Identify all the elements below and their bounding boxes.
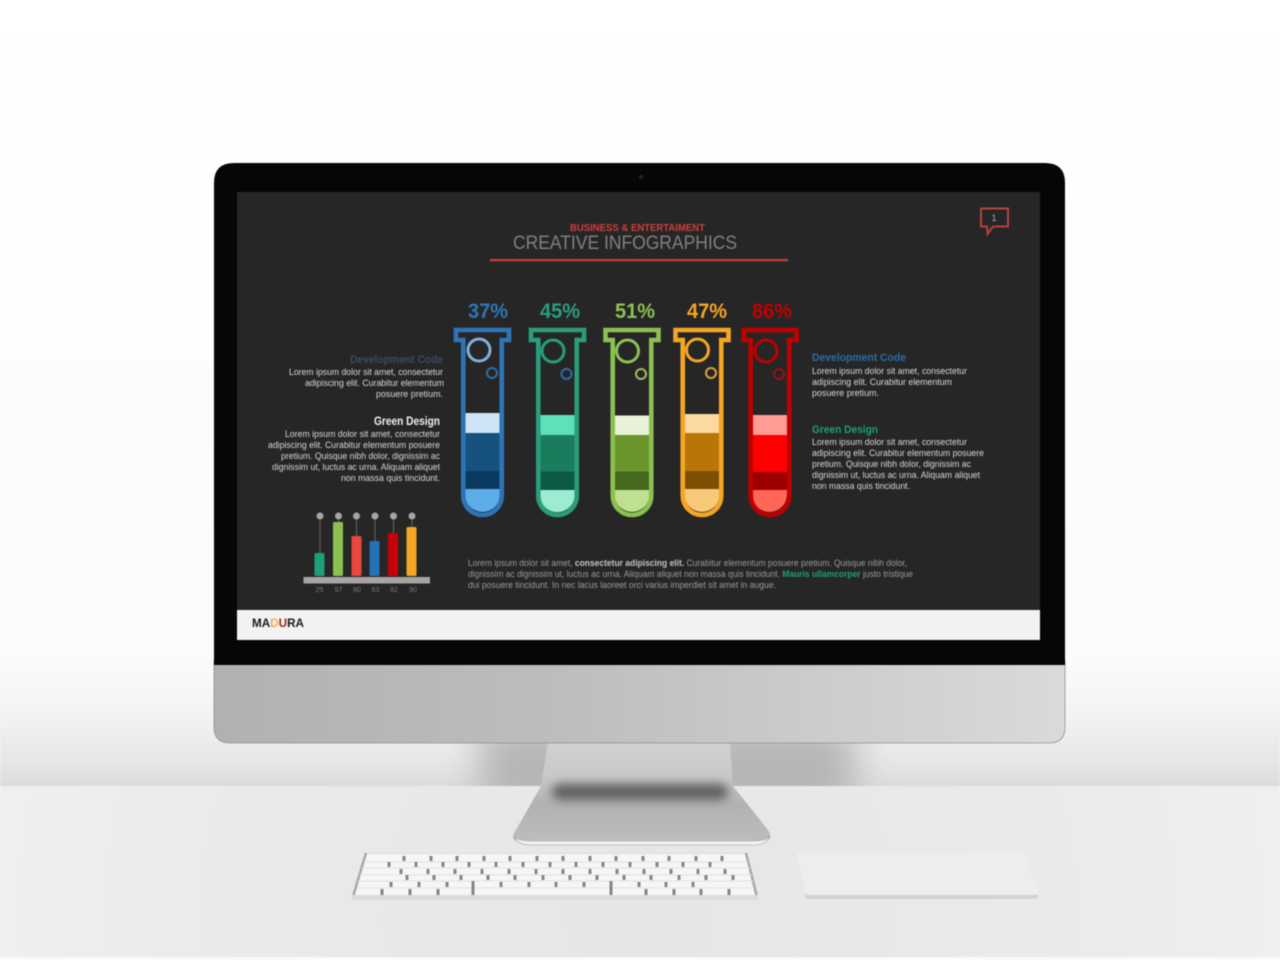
key rows xyxy=(357,862,754,888)
86 percent: 86% xyxy=(752,300,792,323)
test tube: red xyxy=(744,330,796,515)
value labels: 80 xyxy=(353,587,361,594)
stand shadow on wall xyxy=(463,743,872,786)
right text: development code: adipiscing elit. Curabitur elementum xyxy=(812,377,952,387)
test tube: green xyxy=(606,330,658,515)
body copy: Lorem ipsum dolor sit amet, consectetur xyxy=(812,366,967,376)
test tube: blue xyxy=(456,330,509,515)
image edge strip xyxy=(0,957,1280,960)
subtitle: BUSINESS & ENTERTAIMENT xyxy=(570,222,706,234)
left text: development code: adipiscing elit. Curabitur elementum xyxy=(305,378,444,388)
bottom paragraph: dignissim ac dignissim ut, luctus ac urna. Aliquam aliquet non massa quis tincidunt. Mauris ullamcorper justo tristique xyxy=(468,569,913,579)
left text: development code: posuere pretium. xyxy=(376,389,443,399)
logo: MADURA xyxy=(252,618,304,630)
test tube: teal xyxy=(531,330,584,515)
right text: green design: dignissim ut, luctus ac urna. Aliquam aliquet xyxy=(812,470,980,480)
percent labels xyxy=(468,300,792,323)
stem dots xyxy=(316,512,416,520)
baseline xyxy=(304,577,430,584)
right text: green design: adipiscing elit. Curabitur elementum posuere xyxy=(812,448,984,458)
side edges xyxy=(354,853,756,895)
screen panel xyxy=(237,192,1040,610)
37 percent: 37% xyxy=(468,300,508,323)
bars xyxy=(314,522,416,576)
stand shadow band xyxy=(552,784,728,800)
monitor chin xyxy=(214,660,1065,743)
heading: Development Code xyxy=(350,354,443,366)
icon: speech bubble page number xyxy=(981,208,1008,234)
body copy: Lorem ipsum dolor sit amet, consectetur xyxy=(285,429,440,439)
desk surface xyxy=(0,786,1280,957)
right text: green design: pretium. Quisque nibh dolor, dignissim ac xyxy=(812,459,971,469)
stand base lip xyxy=(514,836,770,845)
heading: Green Design xyxy=(374,416,440,428)
value labels: 25 xyxy=(316,587,323,594)
value labels: 90 xyxy=(409,587,417,594)
body copy: Lorem ipsum dolor sit amet, consectetur xyxy=(812,437,967,447)
left text: green design xyxy=(268,416,440,483)
stems xyxy=(320,516,412,553)
51 percent: 51% xyxy=(615,300,655,323)
icon: speech bubble page number: 1 xyxy=(991,213,997,223)
left text: green design: adipiscing elit. Curabitur elementum posuere xyxy=(268,440,440,450)
monitor bezel xyxy=(214,163,1065,665)
left text: green design: dignissim ut, luctus ac urna. Aliquam aliquet xyxy=(272,462,440,472)
title underline xyxy=(490,259,788,261)
title block xyxy=(490,222,788,261)
value labels: 63 xyxy=(372,587,379,594)
key gaps xyxy=(382,856,733,895)
body copy: Lorem ipsum dolor sit amet, consectetur xyxy=(289,367,443,377)
monitor stand xyxy=(513,742,770,845)
45 percent: 45% xyxy=(540,300,580,323)
right text: development code xyxy=(812,352,967,398)
bar chart xyxy=(304,512,430,594)
keyboard xyxy=(352,853,758,900)
right text: green design xyxy=(812,424,984,491)
value labels: 97 xyxy=(335,587,342,594)
value labels: 82 xyxy=(390,587,398,594)
left text: green design: non massa quis tincidunt. xyxy=(341,473,440,483)
camera xyxy=(638,174,644,180)
left text: green design: pretium. Quisque nibh dolor, dignissim ac xyxy=(281,451,440,461)
bottom paragraph: Lorem ipsum dolor sit amet, consectetur adipiscing elit. Curabitur elementum posuere pretium. Quisque nibh dolor, xyxy=(468,558,907,568)
trackpad xyxy=(797,852,1038,899)
47 percent: 47% xyxy=(687,300,727,323)
right text: development code: posuere pretium. xyxy=(812,388,879,398)
heading: Green Design xyxy=(812,424,878,436)
bottom paragraph: dui posuere tincidunt. In nec lacus laoreet orci varius imperdiet sit amet in augue. xyxy=(468,580,776,590)
spacebar edges xyxy=(473,881,611,895)
right text: green design: non massa quis tincidunt. xyxy=(812,481,910,491)
bottom paragraph xyxy=(468,558,913,590)
footer bar xyxy=(237,610,1040,640)
left text: development code xyxy=(289,354,444,399)
heading: Development Code xyxy=(812,352,906,364)
test tube: orange xyxy=(676,330,728,515)
value labels xyxy=(316,587,417,594)
main title: CREATIVE INFOGRAPHICS xyxy=(513,232,737,254)
